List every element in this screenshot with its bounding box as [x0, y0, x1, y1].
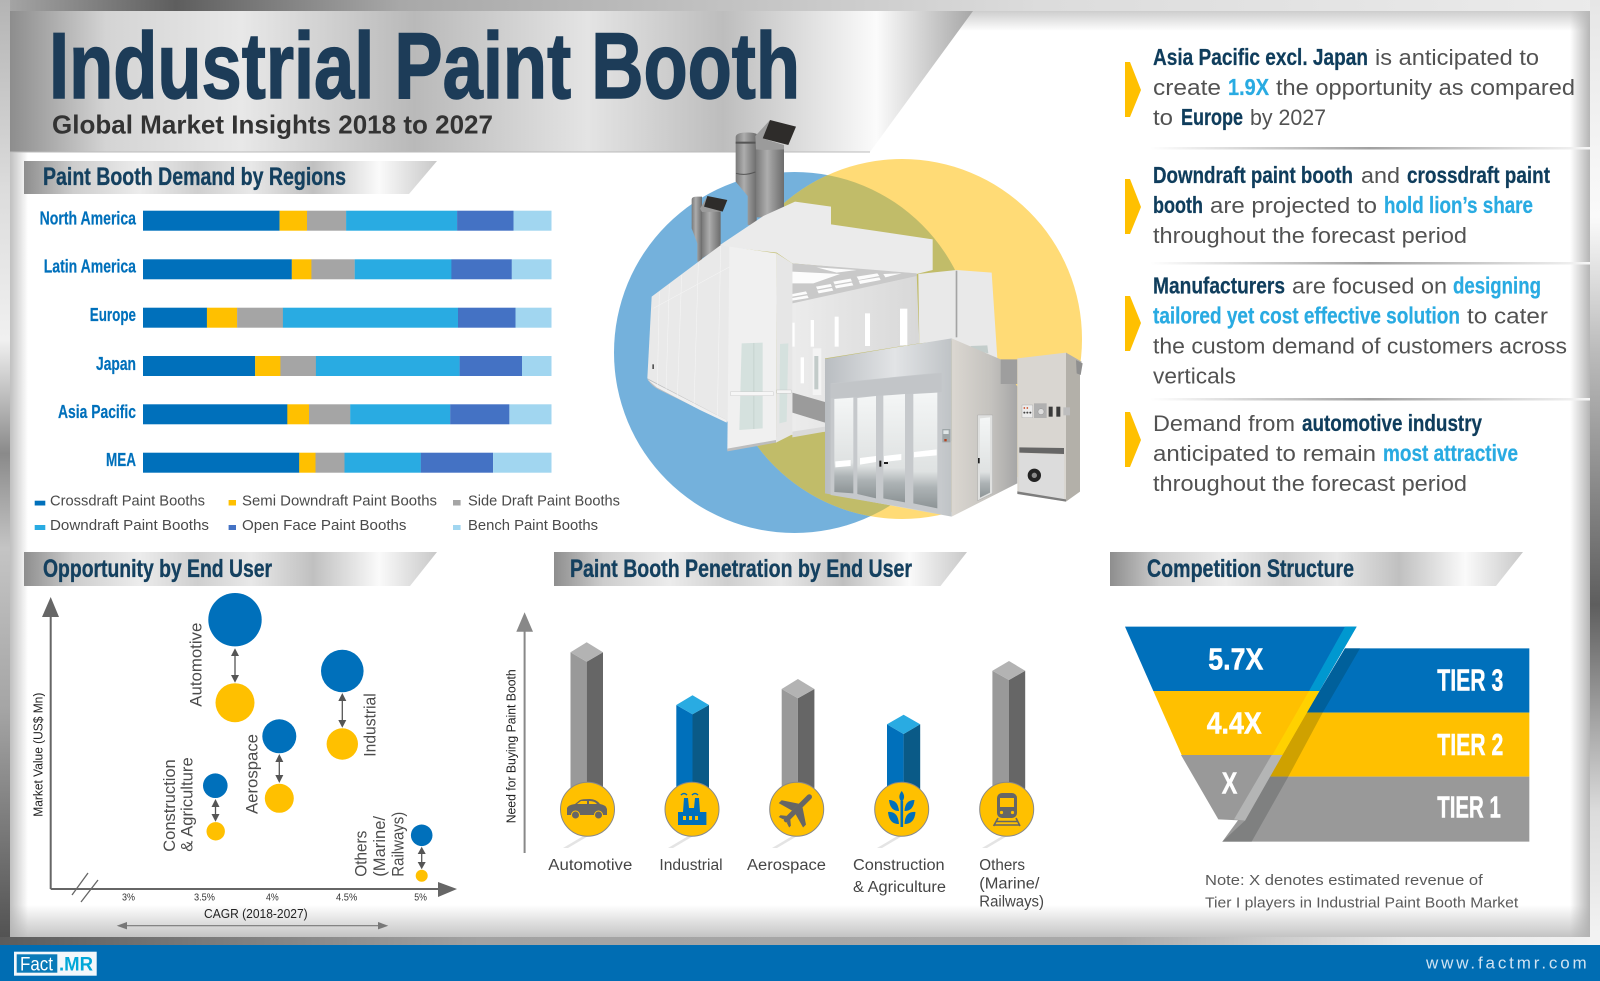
takeaway 3: tailored yet cost effective solution — [1153, 302, 1460, 328]
website url: www.factmr.com — [1425, 953, 1587, 972]
heading: penetration: Paint Booth Penetration by End User — [570, 555, 912, 583]
category labels: Railways) — [979, 894, 1044, 911]
takeaway 4: Demand from — [1153, 411, 1295, 436]
funnel values — [1207, 641, 1264, 800]
axis ticks: 5% — [414, 892, 427, 904]
heading: competition: Competition Structure — [1147, 555, 1354, 583]
title: Industrial Paint Booth — [49, 13, 800, 118]
icon: chevron — [1125, 296, 1141, 351]
heading: opportunity: Opportunity by End User — [43, 555, 272, 583]
tier labels — [1437, 663, 1503, 825]
takeaway 1: to — [1153, 105, 1173, 130]
icon: car — [560, 782, 614, 848]
axis ticks: 4.5% — [336, 892, 357, 904]
note — [1205, 872, 1519, 911]
stacked bar chart: Europe — [90, 305, 136, 325]
takeaway 4: most attractive — [1383, 440, 1518, 466]
category labels: Industrial — [659, 857, 723, 874]
category labels: (Marine/ — [979, 875, 1040, 892]
panel: competition structure — [1110, 552, 1529, 911]
bubbles: aerospace — [244, 719, 296, 814]
takeaway 1: Asia Pacific excl. Japan — [1153, 44, 1368, 70]
takeaway 2: are projected to — [1210, 193, 1377, 218]
icon: train — [980, 782, 1034, 848]
panel: opportunity by end user — [24, 552, 457, 929]
takeaway 4: automotive industry — [1302, 410, 1482, 436]
logo: Fact.MR — [14, 952, 97, 976]
takeaway 2 — [1125, 162, 1550, 248]
footer bar — [0, 945, 1600, 981]
bubbles: industrial: Industrial — [362, 693, 380, 757]
stacked bar chart — [40, 208, 551, 473]
takeaway 3: to cater — [1467, 304, 1548, 328]
takeaway 2: booth — [1153, 192, 1203, 218]
icon: chevron — [1125, 412, 1141, 467]
takeaway 1 — [1125, 44, 1575, 130]
icon: factory — [665, 782, 719, 848]
takeaway 2: crossdraft paint — [1407, 162, 1550, 188]
stacked bar chart: Latin America — [44, 257, 137, 277]
bubbles: automotive — [188, 593, 262, 722]
axis ticks: 3.5% — [194, 892, 215, 904]
bubbles: automotive: Automotive — [188, 623, 206, 707]
tier labels: TIER 3 — [1437, 663, 1503, 698]
panel: key takeaways — [1125, 44, 1590, 496]
panel: penetration by end user — [505, 552, 1044, 911]
takeaway 4 — [1125, 410, 1518, 496]
takeaway 3 — [1125, 272, 1567, 388]
category labels — [548, 857, 1044, 911]
takeaway 2: hold lion’s share — [1384, 192, 1533, 218]
stacked bar chart: North America — [40, 208, 137, 228]
logo: Fact.MR: Fact — [20, 954, 54, 976]
illustration: paint booths — [647, 120, 997, 451]
takeaway 4: anticipated to remain — [1153, 441, 1376, 466]
takeaway 3: Manufacturers — [1153, 272, 1285, 298]
logo: Fact.MR: .MR — [59, 954, 93, 976]
takeaway 3: are focused on — [1292, 274, 1447, 298]
legend: Semi Downdraft Paint Booths — [242, 494, 437, 510]
axis ticks: 3% — [122, 892, 135, 904]
control cabinet — [1017, 353, 1083, 502]
category labels: Others — [979, 857, 1025, 874]
bubbles: others: (Marine/ — [371, 816, 389, 877]
note: Tier I players in Industrial Paint Booth Market — [1205, 894, 1519, 911]
bubbles: others — [353, 812, 433, 882]
category labels: & Agriculture — [853, 879, 946, 896]
overlapping circles backdrop — [614, 159, 1082, 533]
takeaway 3: verticals — [1153, 364, 1236, 388]
icon: chevron — [1125, 62, 1141, 117]
panel: paint booth demand by regions — [24, 161, 620, 534]
heading: opportunity — [24, 552, 437, 586]
bubbles: industrial — [321, 650, 380, 760]
legend: Crossdraft Paint Booths — [50, 494, 205, 510]
takeaway 2: throughout the forecast period — [1153, 223, 1467, 248]
takeaway 3: designing — [1453, 272, 1541, 298]
legend: Downdraft Paint Booths — [50, 518, 209, 534]
stacked bar chart: Asia Pacific — [58, 402, 136, 422]
large booth ducts — [692, 120, 796, 262]
large booth body — [647, 202, 997, 451]
icon: chevron — [1125, 179, 1141, 234]
heading: competition — [1110, 552, 1523, 586]
axis ticks — [122, 892, 427, 904]
stacked bar chart: Japan — [96, 354, 136, 374]
bubbles: others: Railways) — [389, 812, 407, 877]
funnel values: X — [1222, 765, 1238, 800]
arrow: CAGR span — [117, 922, 388, 929]
tier labels: TIER 1 — [1437, 790, 1501, 825]
category labels: Construction — [853, 857, 945, 874]
bubbles: aerospace: Aerospace — [244, 734, 262, 814]
bubbles: construction and agriculture — [161, 757, 228, 852]
legend: Side Draft Paint Booths — [468, 494, 620, 510]
bubbles: construction and agriculture: Construction — [161, 759, 179, 852]
axis ticks: 4% — [266, 892, 279, 904]
icon: plane — [770, 782, 824, 848]
takeaway 1: Europe — [1181, 104, 1243, 130]
legend — [35, 494, 620, 534]
funnel values: 5.7X — [1208, 641, 1264, 676]
takeaway 2: and — [1361, 163, 1400, 188]
takeaway 1: the opportunity as compared — [1276, 75, 1575, 100]
icon: plant — [875, 782, 929, 848]
bubble chart axes — [42, 597, 457, 902]
takeaway 1: is anticipated to — [1375, 45, 1539, 70]
takeaway 1: create — [1153, 75, 1221, 100]
stacked bar chart: MEA — [106, 450, 136, 470]
tier labels: TIER 2 — [1437, 727, 1503, 762]
takeaway 1: 1.9X — [1228, 74, 1270, 100]
takeaway 3: the custom demand of customers across — [1153, 334, 1567, 358]
takeaway 1: by 2027 — [1250, 105, 1326, 130]
title banner — [10, 11, 973, 152]
small booth — [825, 338, 1083, 517]
subtitle: Global Market Insights 2018 to 2027 — [52, 110, 493, 140]
funnel and tier bars — [1125, 627, 1529, 842]
heading: demand by regions: Paint Booth Demand by Regions — [43, 163, 346, 191]
takeaway 4: throughout the forecast period — [1153, 471, 1467, 496]
bubbles: others: Others — [353, 831, 371, 877]
bubbles: construction and agriculture: & Agriculture — [179, 757, 197, 852]
axis label: market value: Market Value (US$ Mn) — [32, 693, 46, 817]
note: Note: X denotes estimated revenue of — [1205, 872, 1484, 889]
axis label: CAGR: CAGR (2018-2027) — [204, 907, 308, 921]
funnel values: 4.4X — [1207, 705, 1262, 740]
legend: Open Face Paint Booths — [242, 518, 406, 534]
axis: need for buying — [505, 612, 533, 853]
3D bars — [570, 642, 1025, 809]
legend: Bench Paint Booths — [468, 518, 598, 534]
category labels: Aerospace — [747, 857, 826, 874]
axis: need for buying: Need for Buying Paint Booth — [505, 669, 519, 823]
category labels: Automotive — [548, 857, 632, 874]
takeaway 2: Downdraft paint booth — [1153, 162, 1353, 188]
